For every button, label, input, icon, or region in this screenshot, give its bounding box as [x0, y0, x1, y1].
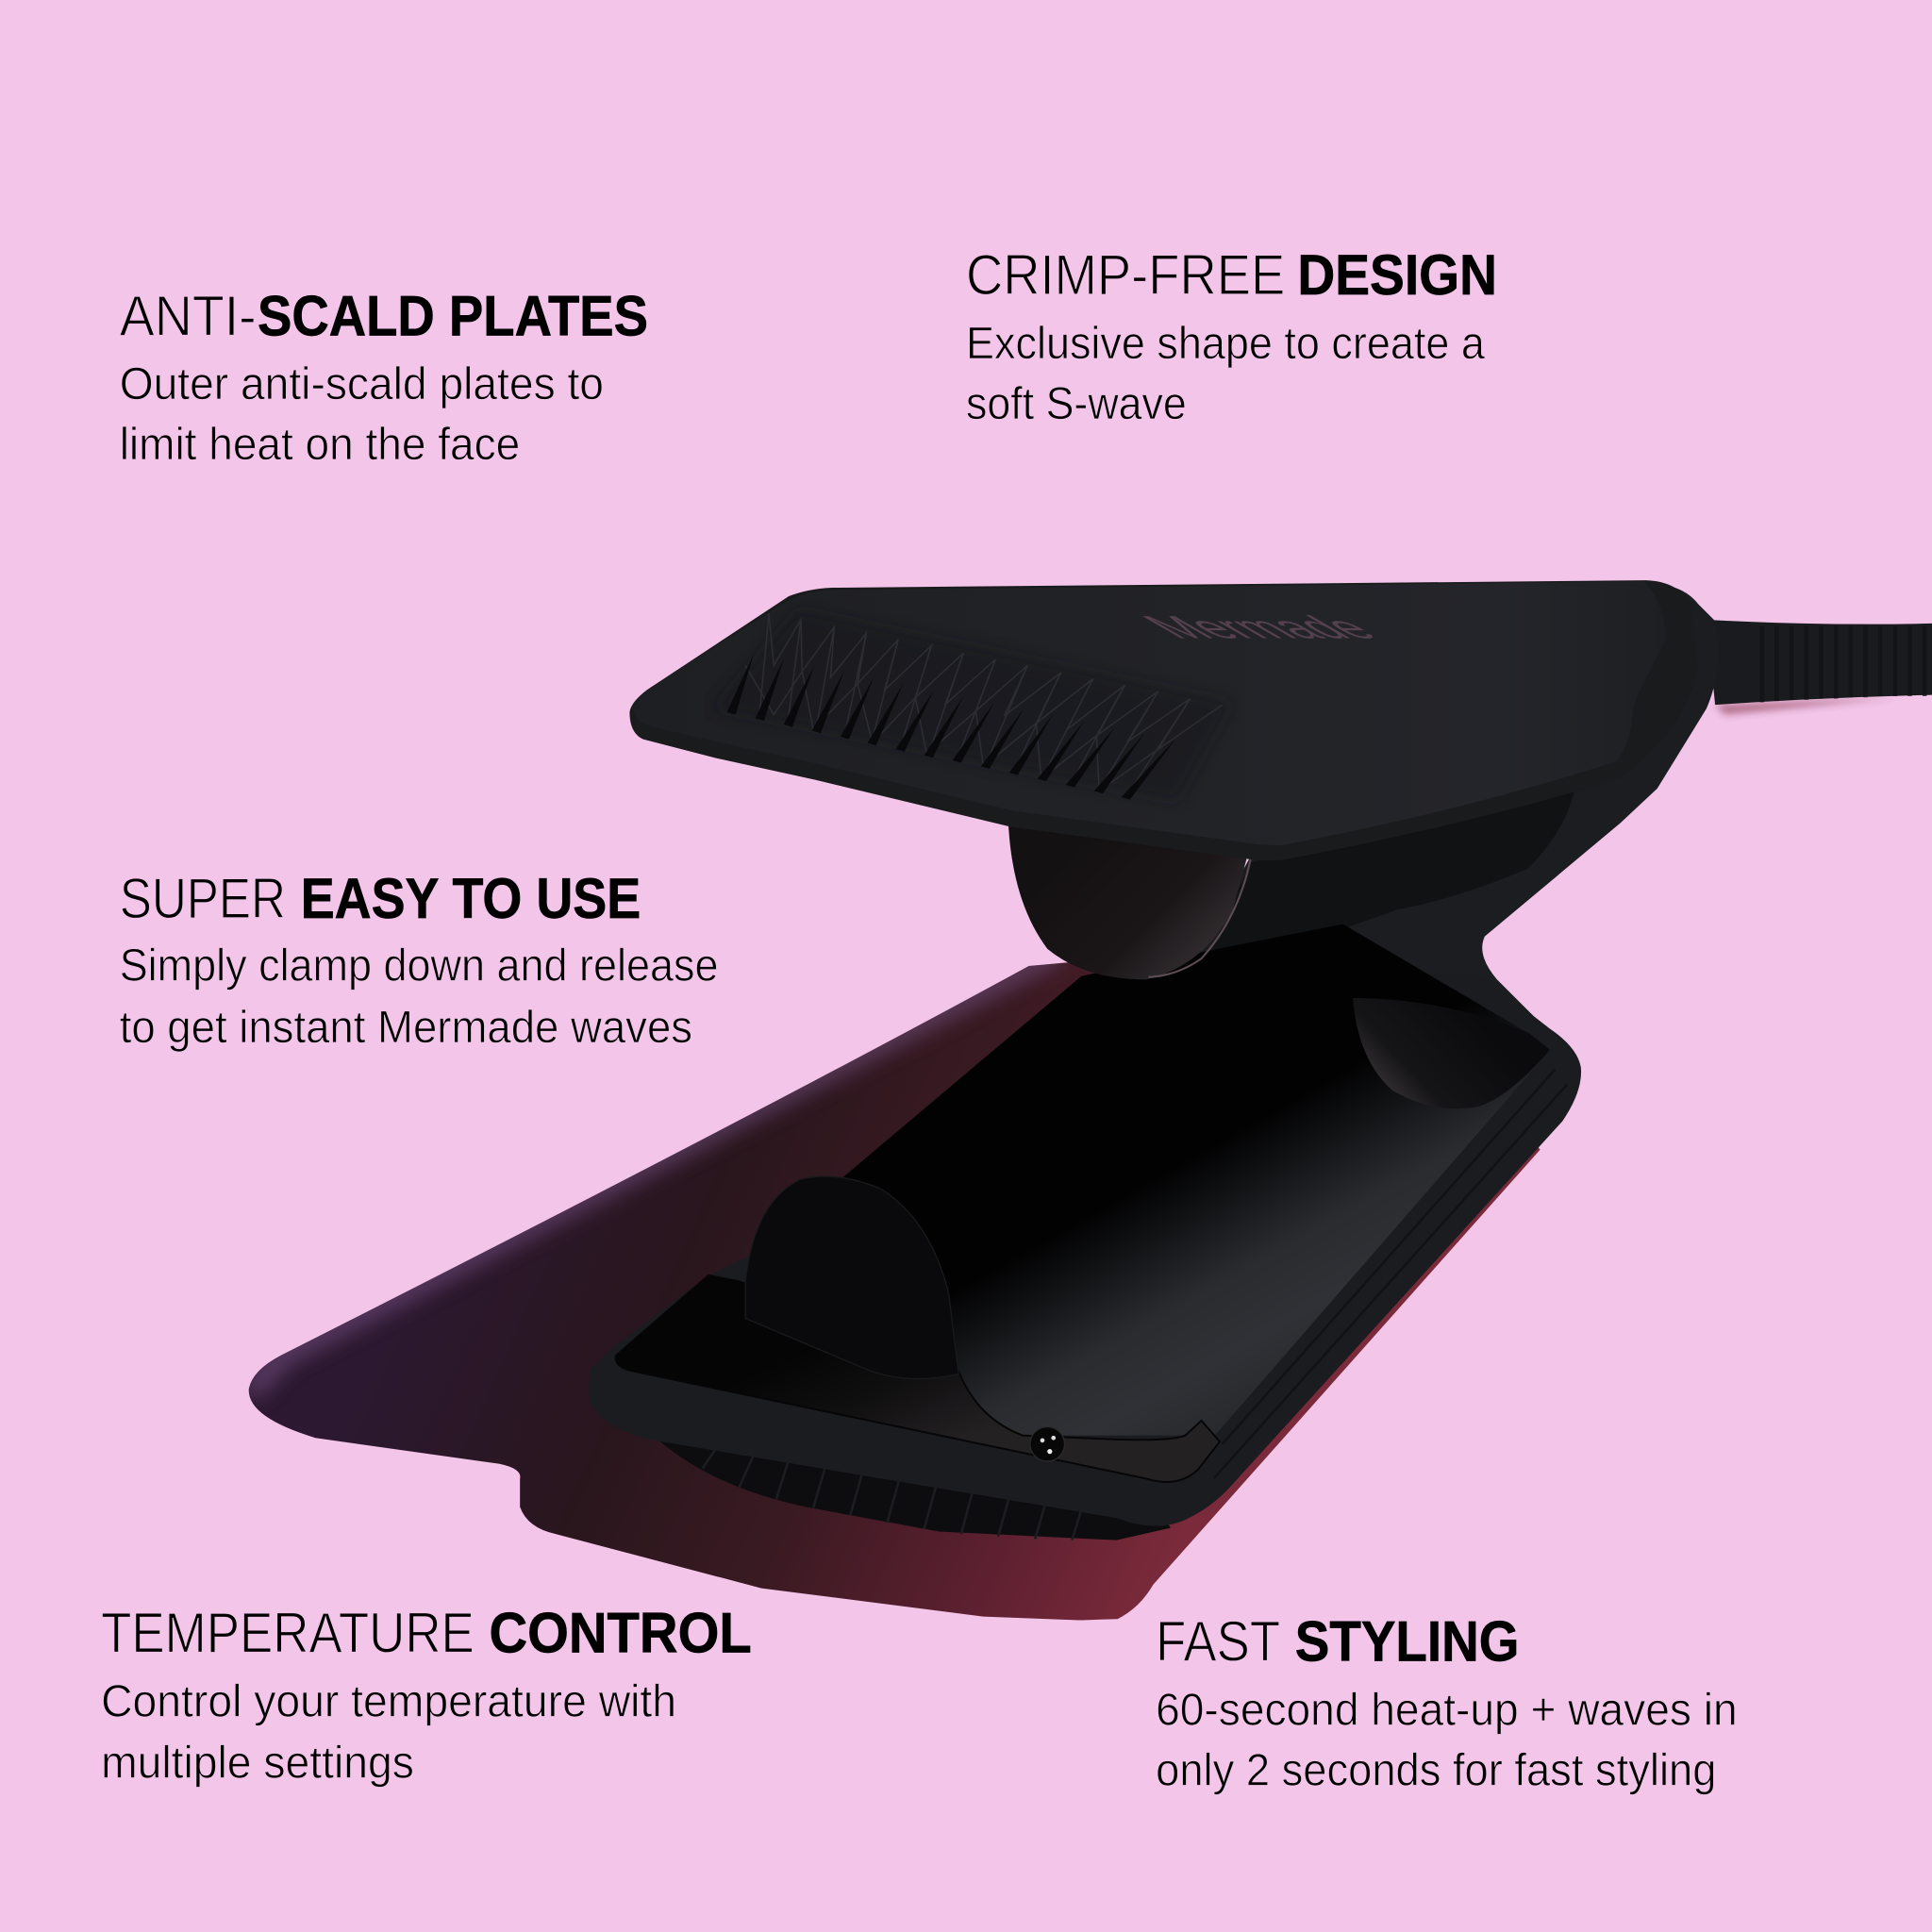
- feature: super easy to use: to get instant Mermade waves: [120, 1002, 692, 1053]
- tray floor and wall: [752, 924, 1553, 1436]
- upper clamp top face: [632, 581, 1666, 845]
- feature: fast styling: [1156, 1610, 1738, 1796]
- feature: temperature control: multiple settings: [101, 1738, 414, 1789]
- rubber grip underside: [647, 1429, 1171, 1541]
- front wave cam: [745, 1176, 958, 1379]
- shaded underside of upper arm: [1201, 776, 1577, 974]
- rim grooves: [1214, 1070, 1567, 1478]
- feature: temperature control: CONTROL: [490, 1602, 752, 1665]
- feature: crimp-free design: DESIGN: [1297, 243, 1497, 307]
- feature: super easy to use: [120, 867, 718, 1053]
- feature: temperature control: TEMPERATURE: [101, 1602, 475, 1665]
- feature: crimp-free design: soft S-wave: [966, 378, 1187, 429]
- feature: super easy to use: SUPER: [120, 867, 286, 930]
- feature: fast styling: FAST: [1156, 1610, 1280, 1674]
- upper wave cam: [1008, 813, 1251, 979]
- feature: temperature control: Control your temperature with: [101, 1675, 676, 1726]
- feature: anti-scald plates: Outer anti-scald plates to: [120, 358, 604, 409]
- feature: fast styling: 60-second heat-up + waves in: [1156, 1685, 1738, 1736]
- power cord: [1707, 620, 1932, 705]
- screw: [1030, 1426, 1064, 1461]
- feature: crimp-free design: Exclusive shape to create a: [966, 318, 1485, 369]
- infographic canvas: [102, 254, 1932, 1794]
- feature: anti-scald plates: ANTI-: [120, 284, 257, 347]
- feature: anti-scald plates: limit heat on the face: [120, 419, 520, 470]
- metal end plate: [616, 1275, 1220, 1482]
- cast shadow under the styler: [249, 697, 1897, 1621]
- lower tray outer rim: [589, 974, 1581, 1526]
- feature: super easy to use: EASY TO USE: [301, 867, 641, 930]
- feature: anti-scald plates: [120, 284, 648, 470]
- feature: fast styling: STYLING: [1295, 1610, 1519, 1674]
- brand signature: Mermade: [1127, 609, 1392, 645]
- feature: super easy to use: Simply clamp down and release: [120, 941, 718, 991]
- feature: crimp-free design: [966, 243, 1497, 429]
- grip texture: [715, 610, 1232, 801]
- feature: temperature control: [101, 1602, 752, 1789]
- hinge and neck: [1183, 584, 1718, 1072]
- upper clamp body: [629, 580, 1698, 860]
- back wave cam: [1353, 998, 1550, 1108]
- feature: anti-scald plates: SCALD PLATES: [258, 284, 648, 347]
- feature: crimp-free design: CRIMP-FREE: [966, 243, 1285, 307]
- feature: fast styling: only 2 seconds for fast styling: [1156, 1745, 1716, 1796]
- styler product illustration: [589, 580, 1932, 1541]
